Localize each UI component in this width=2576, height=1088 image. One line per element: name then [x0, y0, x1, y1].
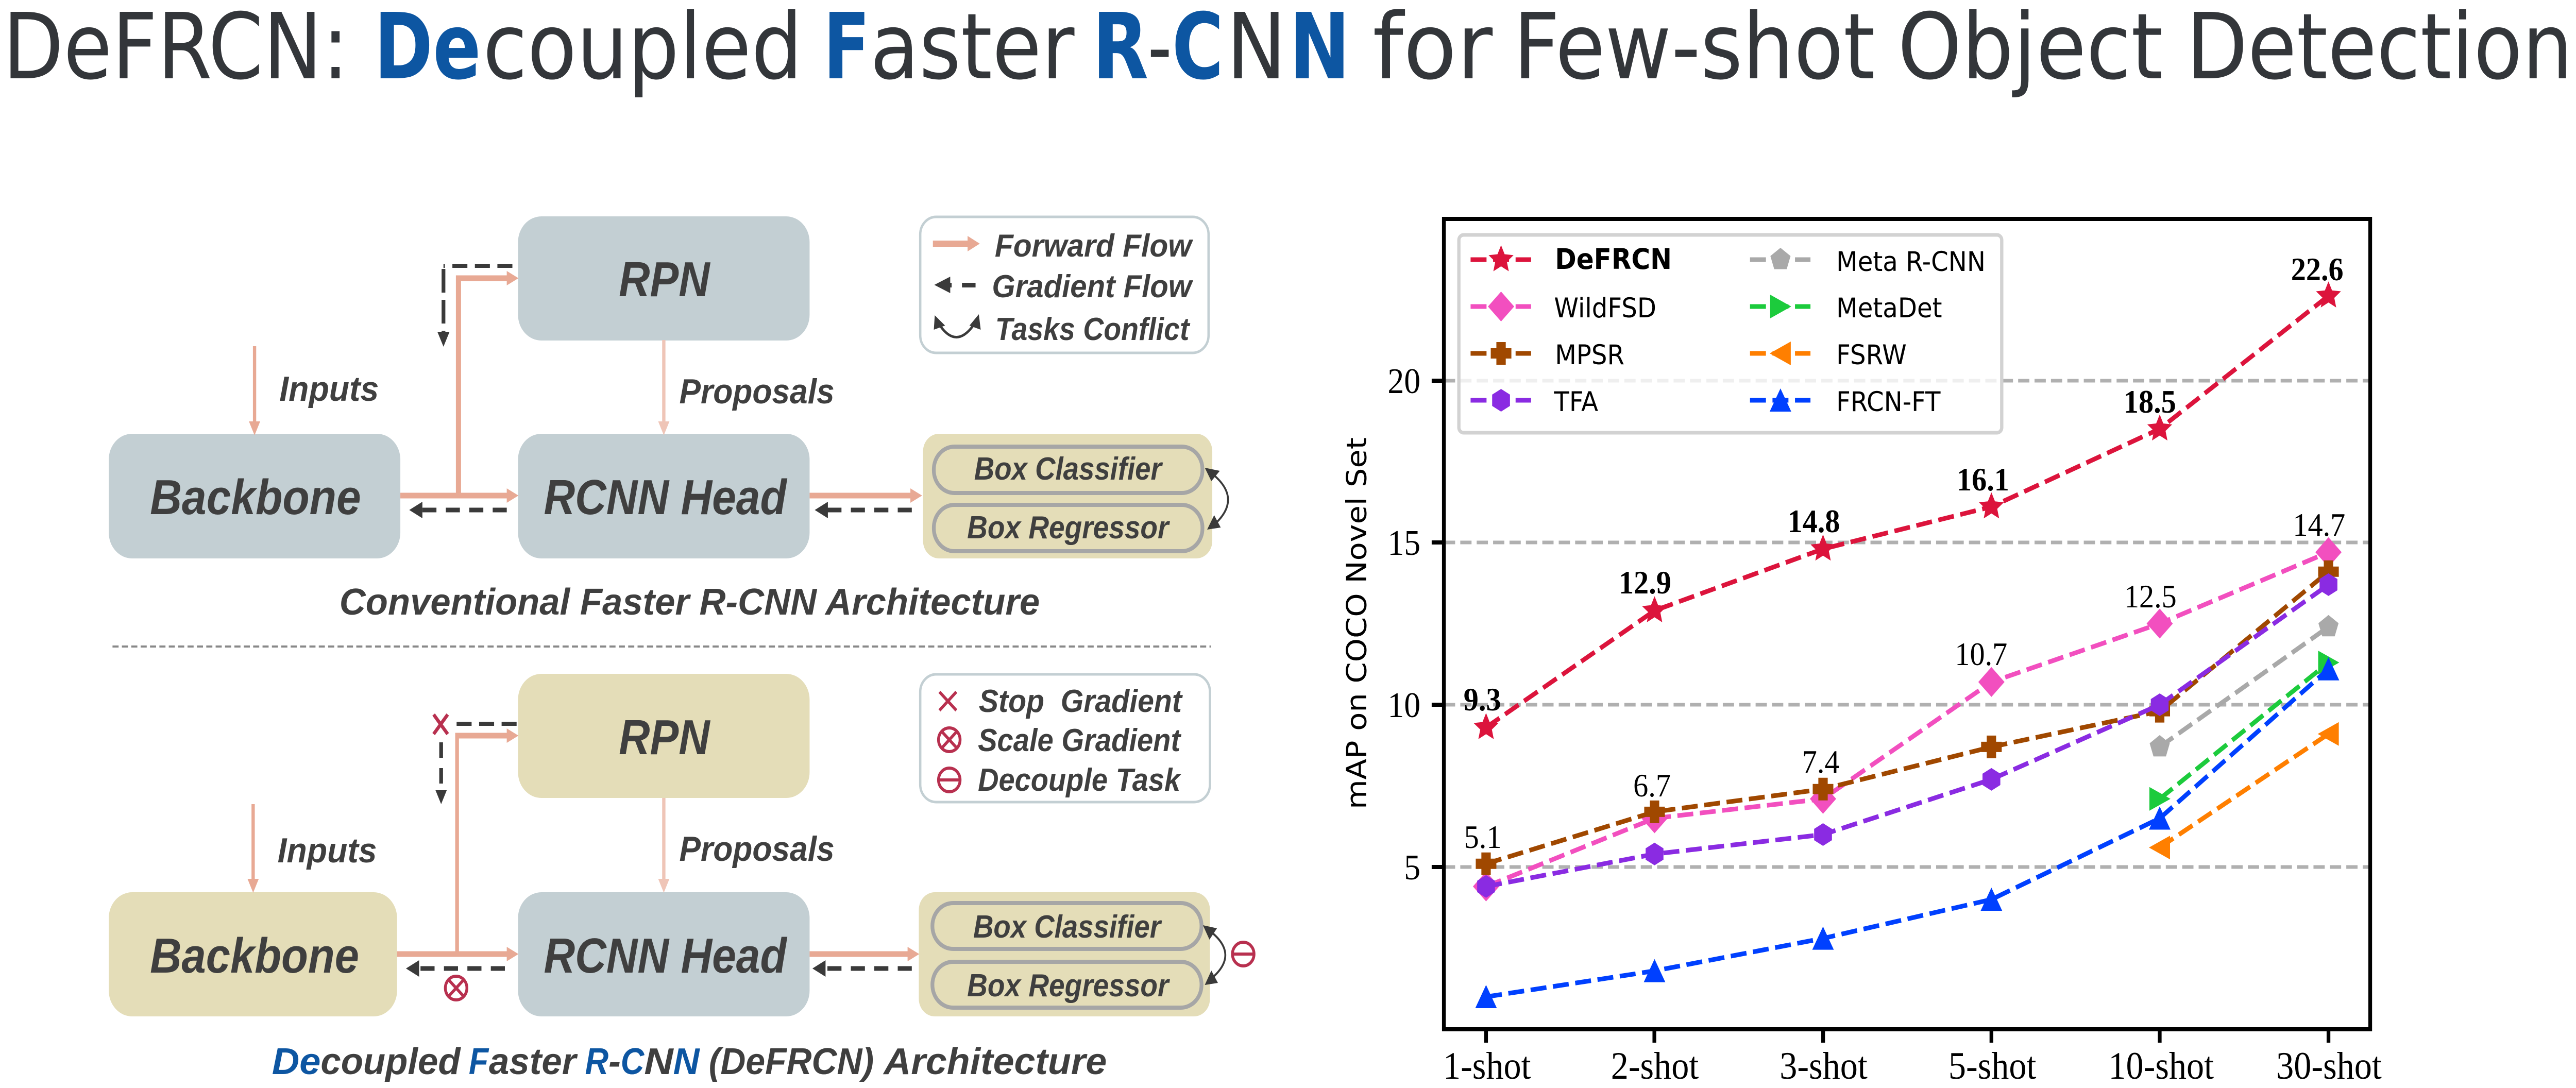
y axis tick labels: 20 — [1387, 361, 1420, 401]
box: RPN — [518, 674, 809, 798]
chart legend — [1459, 235, 2002, 433]
legend entry: Meta R-CNN — [1750, 246, 1986, 278]
y axis tick labels: 15 — [1387, 523, 1420, 563]
caption: decoupled architecture: aster — [489, 1041, 578, 1082]
series: FSRW — [2149, 722, 2339, 859]
pill: Box Classifier — [934, 447, 1202, 493]
arrow: gradient flow RPN to backbone — [437, 266, 513, 347]
arrow: gradient flow head to backbone — [409, 502, 507, 518]
caption: decoupled architecture: N — [644, 1041, 674, 1082]
legend entry: FRCN-FT: FRCN-FT — [1836, 386, 1941, 418]
series: TFA — [1477, 573, 2337, 898]
legend item: gradient flow: Gradient Flow — [992, 268, 1194, 304]
series: MPSR — [1476, 560, 2339, 875]
panel: box classifier and regressor — [923, 434, 1212, 558]
legend entry: DeFRCN — [1470, 243, 1672, 276]
caption: decoupled architecture: R — [585, 1041, 608, 1082]
legend entry: FSRW: FSRW — [1836, 339, 1907, 371]
box: RCNN Head: RCNN Head — [544, 470, 788, 525]
box: RPN — [518, 216, 809, 341]
box: Backbone — [109, 892, 397, 1016]
data labels: DeFRCN: 22.6 — [2291, 251, 2344, 288]
legend item: decouple task: Decouple Task — [978, 762, 1182, 798]
data labels: DeFRCN: 12.9 — [1619, 565, 1671, 601]
box: RPN: RPN — [619, 252, 710, 307]
arrow: tasks conflict — [1205, 468, 1228, 530]
legend item: tasks conflict: Tasks Conflict — [995, 311, 1191, 347]
box: Backbone — [109, 434, 400, 558]
x axis tick labels — [1443, 1044, 2382, 1087]
y axis tick labels: 10 — [1387, 685, 1420, 725]
data labels: DeFRCN: 14.8 — [1788, 503, 1840, 540]
y axis tick labels: 5 — [1404, 847, 1420, 888]
arrow: gradient flow classifier to head — [812, 960, 912, 977]
series: FRCN-FT — [1476, 657, 2339, 1008]
pill: Box Regressor — [934, 505, 1202, 551]
panel: conventional Faster R-CNN architecture — [109, 216, 1228, 623]
legend entry: MetaDet: MetaDet — [1836, 292, 1942, 324]
legend entry: DeFRCN: DeFRCN — [1555, 243, 1672, 276]
y axis tick labels — [1387, 361, 1420, 888]
data labels: DeFRCN: 9.3 — [1464, 682, 1501, 718]
caption: decoupled architecture: coupled — [320, 1041, 462, 1082]
x axis tick labels: 3-shot — [1780, 1044, 1868, 1087]
panel: decoupled Faster R-CNN architecture — [109, 674, 1254, 1082]
arrow: stopped gradient from RPN — [435, 724, 517, 804]
pill: Box Classifier: Box Classifier — [973, 909, 1162, 945]
x axis tick labels: 10-shot — [2108, 1044, 2214, 1087]
legend: gradient operations — [920, 674, 1210, 802]
legend item: forward flow: Forward Flow — [995, 228, 1194, 264]
pill: Box Regressor — [933, 962, 1201, 1008]
label: Proposals: Proposals — [679, 371, 835, 411]
data labels: best baseline: 7.4 — [1802, 744, 1840, 780]
series: DeFRCN — [1473, 281, 2341, 739]
data labels: DeFRCN: 18.5 — [2124, 384, 2176, 420]
caption: decoupled architecture: (DeFRCN) — [709, 1041, 874, 1082]
pill: Box Classifier: Box Classifier — [974, 451, 1163, 487]
legend entry: MPSR: MPSR — [1555, 339, 1624, 371]
data labels: best baseline — [1464, 507, 2345, 856]
caption: decoupled architecture: C — [621, 1041, 645, 1082]
arrow: proposals — [658, 798, 669, 893]
pill: Box Classifier — [933, 903, 1201, 949]
legend entry: FSRW — [1750, 339, 1907, 371]
arrow: gradient flow classifier to head — [815, 502, 912, 518]
series: MetaDet — [2149, 651, 2339, 811]
caption: decoupled architecture: De — [272, 1041, 320, 1082]
box: RPN: RPN — [619, 710, 710, 765]
box: RCNN Head — [518, 892, 809, 1016]
arrow: forward flow to classifier — [809, 947, 919, 961]
legend entry: MetaDet — [1750, 292, 1942, 324]
arrow: gradient flow head to backbone — [406, 960, 505, 977]
box: RCNN Head — [518, 434, 809, 558]
x axis tick labels: 30-shot — [2276, 1044, 2382, 1087]
title — [3, 0, 2573, 100]
caption: decoupled architecture — [272, 1041, 1107, 1082]
caption: decoupled architecture: F — [469, 1041, 489, 1082]
y axis title: mAP on COCO Novel Set — [1341, 437, 1373, 809]
arrow: forward flow from backbone — [400, 271, 518, 503]
legend entry: WildFSD — [1470, 292, 1656, 324]
legend: flows — [920, 217, 1209, 353]
icon: stop gradient cross — [434, 715, 448, 734]
label: Proposals: Proposals — [679, 829, 835, 869]
icon: scale gradient — [445, 976, 467, 1000]
legend entry: MPSR — [1470, 339, 1624, 371]
series: Meta R-CNN — [2149, 615, 2338, 756]
panel: box classifier and regressor — [919, 892, 1210, 1016]
legend entry: TFA: TFA — [1553, 386, 1598, 418]
arrow: proposals — [658, 340, 669, 435]
arrow: forward flow from backbone — [397, 728, 518, 961]
pill: Box Regressor: Box Regressor — [967, 967, 1170, 1004]
legend item: scale gradient: Scale Gradient — [978, 722, 1181, 758]
legend entry: WildFSD: WildFSD — [1554, 292, 1656, 324]
data labels: best baseline: 12.5 — [2124, 579, 2177, 615]
data labels: best baseline: 14.7 — [2293, 507, 2345, 543]
x axis tick labels: 2-shot — [1611, 1044, 1699, 1087]
caption: decoupled architecture: - — [608, 1041, 621, 1082]
arrow: inputs — [247, 804, 259, 893]
chart frame and ticks — [1432, 219, 2370, 1043]
data labels: DeFRCN — [1464, 251, 2344, 718]
x axis tick labels: 1-shot — [1443, 1044, 1531, 1087]
caption: decoupled architecture: Architecture — [883, 1041, 1107, 1082]
caption: conventional architecture: Conventional Faster R-CNN Architecture — [340, 581, 1040, 623]
arrow: tasks decoupled — [1203, 925, 1225, 985]
label: Inputs: Inputs — [279, 369, 379, 409]
legend entry: FRCN-FT — [1750, 386, 1941, 418]
data labels: best baseline: 5.1 — [1464, 819, 1501, 856]
arrow: forward flow to classifier — [809, 488, 922, 503]
caption: decoupled architecture: N — [673, 1041, 700, 1082]
box: RCNN Head: RCNN Head — [544, 928, 788, 983]
x axis tick labels: 5-shot — [1948, 1044, 2037, 1087]
series: WildFSD — [1473, 537, 2342, 902]
arrow: inputs — [249, 346, 260, 435]
data labels: best baseline: 10.7 — [1955, 636, 2007, 673]
label: Inputs: Inputs — [278, 830, 377, 870]
pill: Box Regressor: Box Regressor — [967, 509, 1170, 546]
legend entry: TFA — [1470, 386, 1598, 418]
legend item: stop gradient: Stop Gradient — [979, 683, 1183, 719]
data labels: best baseline: 6.7 — [1633, 768, 1671, 804]
icon: decouple task — [1232, 942, 1254, 966]
legend entry: Meta R-CNN: Meta R-CNN — [1836, 246, 1986, 278]
box: Backbone: Backbone — [150, 470, 361, 525]
data labels: DeFRCN: 16.1 — [1957, 462, 2009, 498]
line chart: mAP on COCO novel set — [1341, 219, 2382, 1087]
box: Backbone: Backbone — [150, 928, 359, 983]
